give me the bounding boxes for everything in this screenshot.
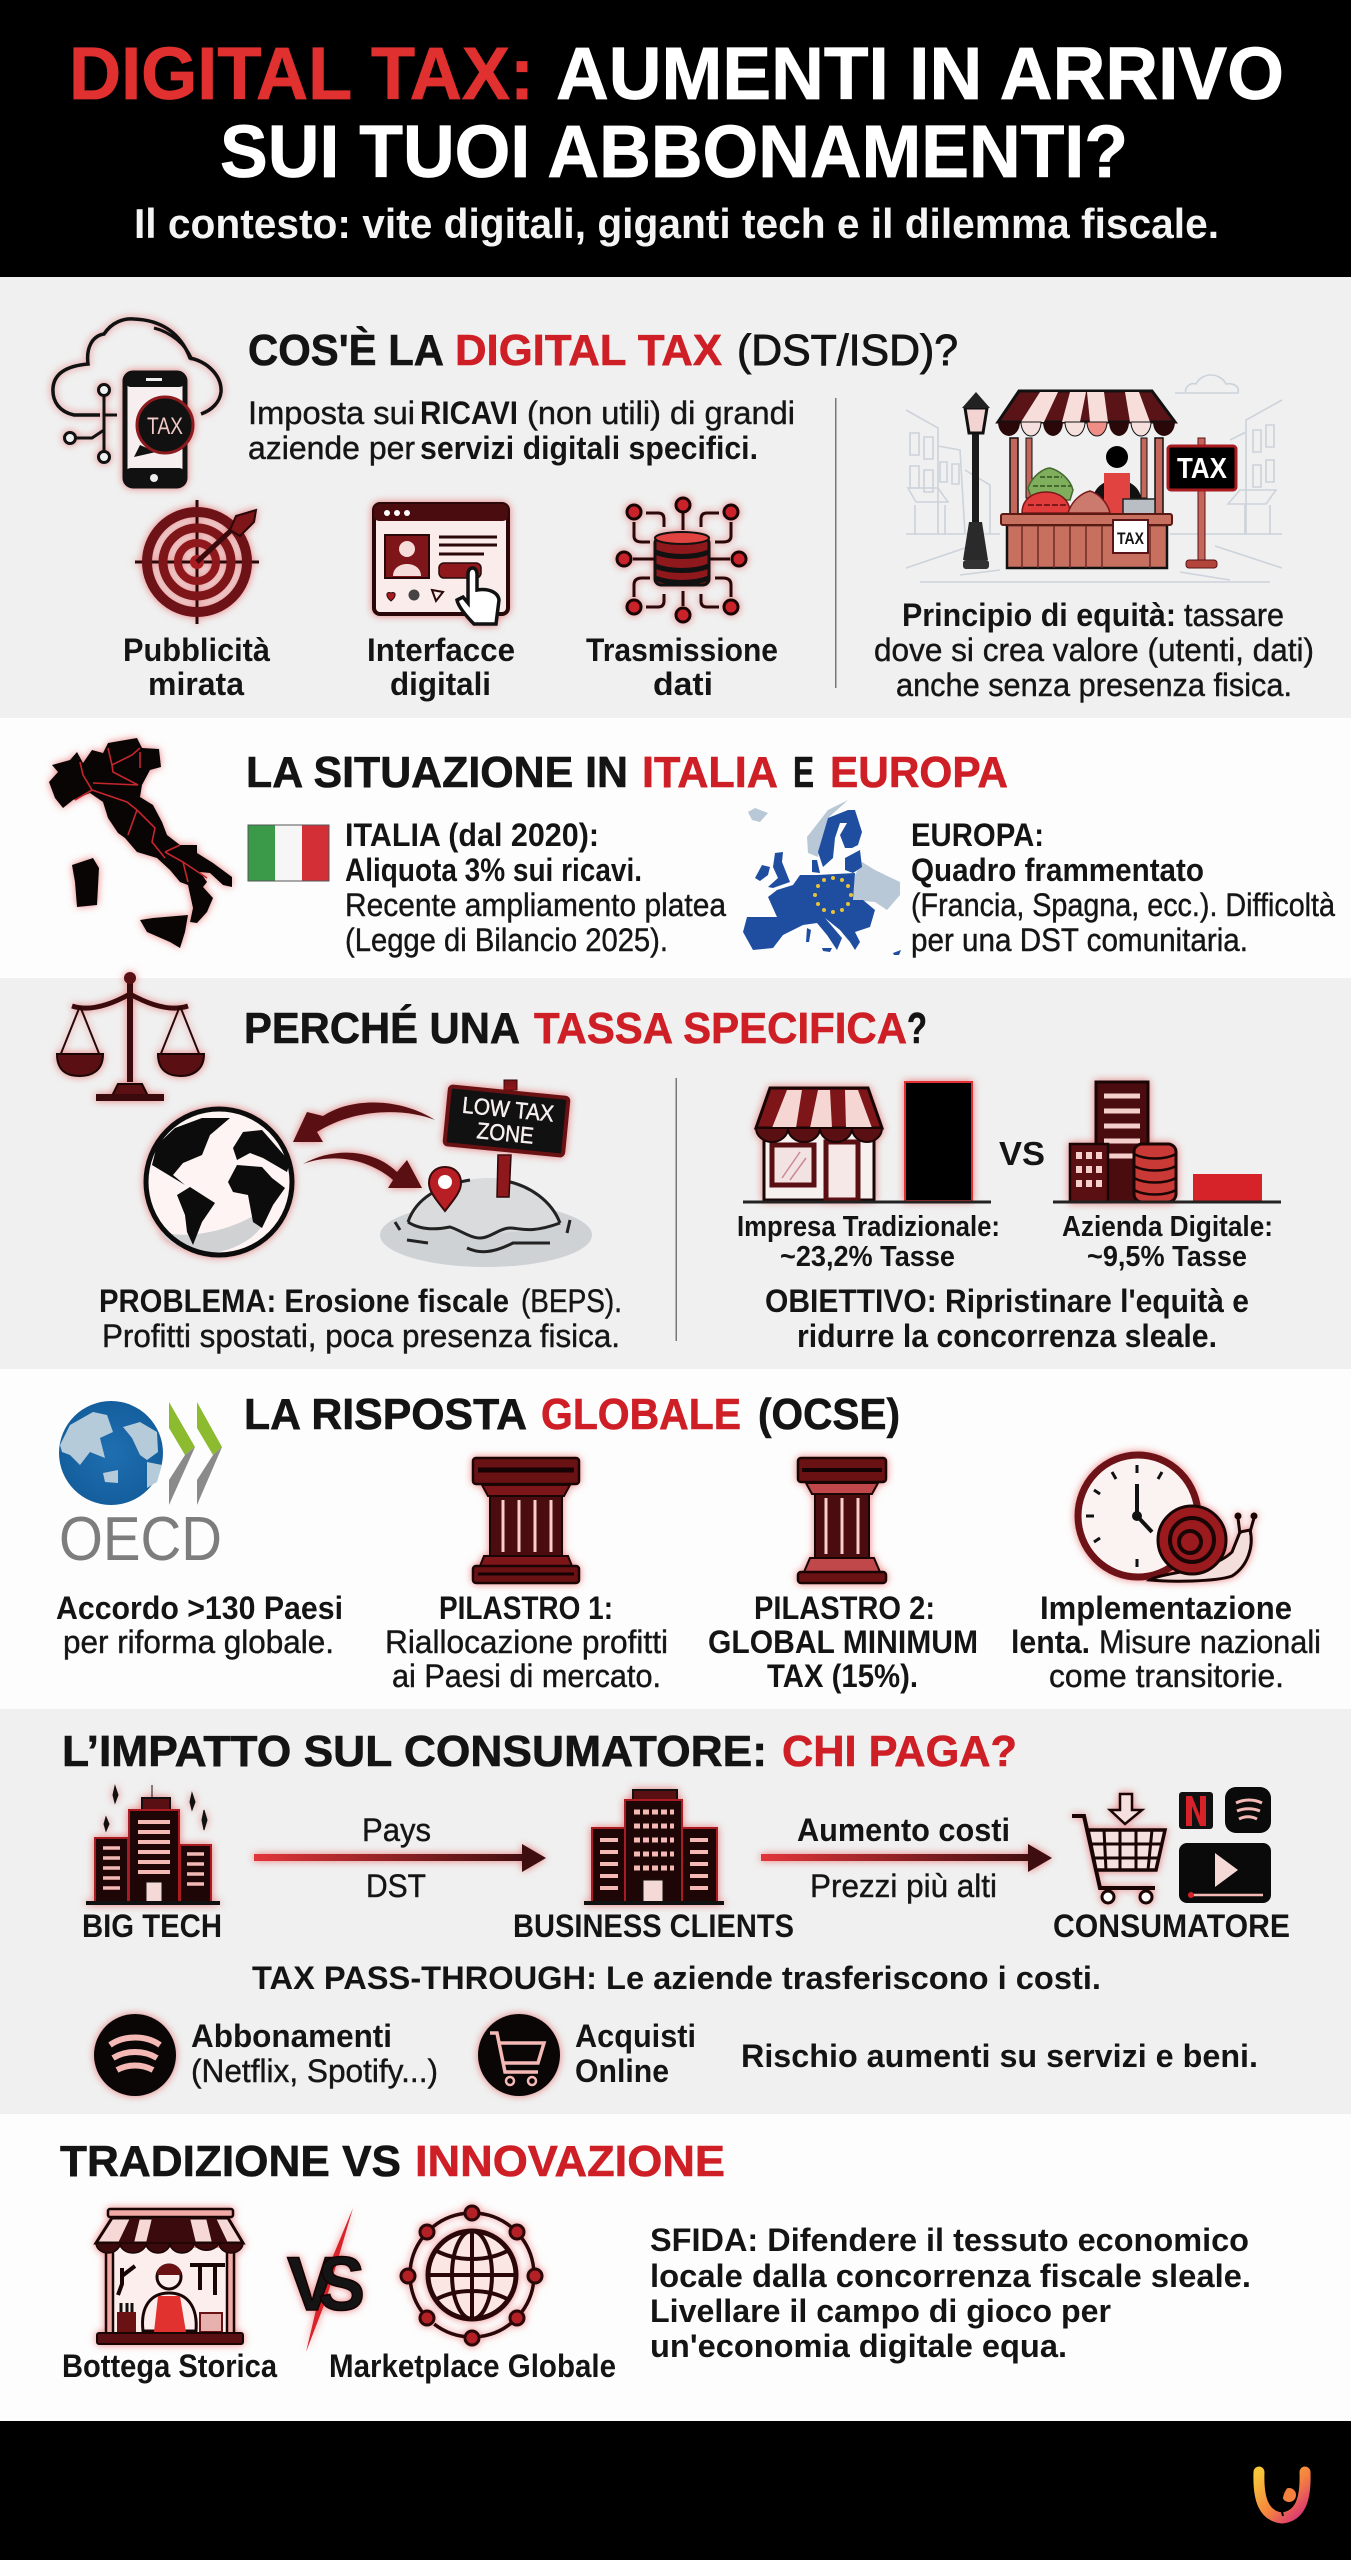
icon: shopping cart <box>1072 1794 1165 1903</box>
vs emblem: S <box>318 2242 365 2327</box>
heading: COS'È LA <box>248 325 444 375</box>
heading: L’IMPATTO SUL CONSUMATORE: <box>62 1727 767 1776</box>
title: DIGITAL TAX: <box>69 32 534 115</box>
label: impresa tradizionale: Impresa Tradizionale: <box>737 1211 1000 1243</box>
text block: definition: Imposta sui <box>248 395 415 431</box>
icon: cloud and phone: TAX <box>147 413 183 440</box>
text block: italia <box>345 817 726 958</box>
text block: pilastro 1: PILASTRO 1: <box>439 1590 613 1626</box>
icon: pillar 2 <box>798 1458 886 1583</box>
text block: sfida: Livellare il campo di gioco per <box>650 2293 1111 2329</box>
illustration: market stall: TAX <box>1177 453 1228 485</box>
illustration: market stall <box>906 375 1282 582</box>
label: DST: DST <box>366 1868 426 1904</box>
label: interfacce digitali <box>367 632 515 702</box>
text block: pilastro 1: Riallocazione profitti <box>385 1624 668 1660</box>
title: SUI TUOI ABBONAMENTI? <box>220 110 1128 193</box>
label: big tech: BIG TECH <box>82 1908 222 1944</box>
vs emblem <box>287 2208 365 2352</box>
heading: PERCHÉ UNA <box>244 1003 520 1053</box>
header panel <box>0 0 1351 277</box>
label: trasmissione dati: Trasmissione <box>586 632 778 668</box>
text block: problema <box>99 1283 622 1354</box>
text block: definition: servizi digitali specifici. <box>420 430 758 466</box>
illustration: low tax zone <box>380 1080 592 1267</box>
label: azienda digitale: Azienda Digitale: <box>1062 1211 1273 1243</box>
map: europe <box>743 800 901 955</box>
logo: OECD <box>59 1401 222 1574</box>
illustration: market stall: TAX <box>1117 529 1145 548</box>
icon: video player <box>1179 1843 1271 1903</box>
counter <box>1007 525 1167 568</box>
footer band <box>0 2421 1351 2560</box>
text block: principio di equità: tassare <box>1184 597 1284 633</box>
panel: risposta globale <box>0 1369 1351 1709</box>
heading: GLOBALE <box>541 1390 741 1439</box>
text block: pilastro 1: ai Paesi di mercato. <box>392 1658 661 1694</box>
heading: DIGITAL TAX <box>455 326 722 375</box>
illustration: low tax zone: ZONE <box>476 1117 535 1149</box>
heading <box>246 748 1008 797</box>
text block: europa: per una DST comunitaria. <box>911 922 1248 958</box>
text block: sfida: locale dalla concorrenza fiscale sleale. <box>650 2258 1251 2294</box>
text block: italia: Recente ampliamento platea <box>345 887 726 923</box>
text block: principio di equità: Principio di equità: <box>902 597 1176 633</box>
text block: accordo: per riforma globale. <box>63 1624 334 1660</box>
heading: EUROPA <box>830 748 1008 797</box>
heading <box>60 2137 725 2186</box>
heading <box>244 1390 900 1439</box>
label: impresa tradizionale: ~23,2% Tasse <box>780 1241 955 1273</box>
icon: scales <box>57 972 204 1101</box>
icon: cloud and phone <box>53 319 221 486</box>
arrow: aumento costi <box>761 1844 1052 1872</box>
label: bottega storica: Bottega Storica <box>62 2348 277 2384</box>
text block: accordo <box>56 1590 343 1660</box>
text block: definition <box>248 395 795 466</box>
text block: principio di equità: anche senza presenza fisica. <box>896 667 1292 703</box>
text block: abbonamenti: Abbonamenti <box>191 2018 392 2054</box>
text block: obiettivo <box>765 1283 1249 1354</box>
text block: accordo: Accordo >130 Paesi <box>56 1590 343 1626</box>
subtitle: Il contesto: vite digitali, giganti tech e il dilemma fiscale. <box>134 200 1219 247</box>
icon: italian flag <box>248 825 329 881</box>
icon: spotify tile <box>1225 1787 1271 1833</box>
text block: sfida: un'economia digitale equa. <box>650 2328 1067 2364</box>
label: prezzi più alti: Prezzi più alti <box>810 1868 997 1904</box>
arrow: pays DST <box>254 1844 546 1872</box>
icon: data transmission <box>617 498 746 622</box>
text block: pilastro 1 <box>385 1590 668 1694</box>
text block: implementazione: lenta. <box>1011 1624 1090 1660</box>
icon: marketplace globe <box>401 2206 542 2345</box>
text block: problema: Profitti spostati, poca presenza fisica. <box>102 1318 620 1354</box>
heading: ITALIA <box>642 748 778 797</box>
panel: perché una tassa specifica <box>0 972 1351 1369</box>
icon: clock and snail <box>1078 1455 1258 1581</box>
produce <box>1028 468 1073 500</box>
text block: europa: Quadro frammentato <box>911 852 1204 888</box>
illustration: low tax zone: LOW TAX <box>461 1092 555 1127</box>
street lamp <box>972 433 979 528</box>
stall posts <box>1010 438 1018 522</box>
heading: (DST/ISD)? <box>737 326 958 375</box>
icon: target <box>135 500 259 624</box>
text block: implementazione: come transitorie. <box>1049 1658 1284 1694</box>
text block: europa <box>911 817 1335 958</box>
heading <box>248 325 958 375</box>
text block: acquisti online <box>575 2018 696 2089</box>
tax sign <box>1198 438 1205 562</box>
label: interfacce digitali: digitali <box>390 666 491 702</box>
heading: INNOVAZIONE <box>415 2137 725 2186</box>
map: italy <box>49 738 232 948</box>
icon: digital company <box>1070 1082 1176 1202</box>
vs emblem: V <box>287 2242 337 2327</box>
title <box>69 32 1284 193</box>
text block: implementazione: Implementazione <box>1040 1590 1292 1626</box>
heading: TRADIZIONE VS <box>60 2137 401 2186</box>
icon: spotify circle <box>94 2014 176 2096</box>
label: pubblicità mirata <box>123 632 270 702</box>
text block: sfida <box>650 2222 1251 2364</box>
text: rischio aumenti: Rischio aumenti su servizi e beni. <box>741 2038 1258 2074</box>
panel: impatto sul consumatore <box>0 1709 1351 2114</box>
text block: problema: (BEPS). <box>521 1283 622 1319</box>
text block: implementazione <box>1011 1590 1321 1694</box>
label: azienda digitale: ~9,5% Tasse <box>1087 1241 1247 1273</box>
panel: cos'è la digital tax <box>0 277 1351 718</box>
text block: europa: EUROPA: <box>911 817 1044 853</box>
heading: LA SITUAZIONE IN <box>246 748 628 797</box>
text block: acquisti online: Online <box>575 2053 669 2089</box>
heading: CHI PAGA? <box>782 1727 1017 1776</box>
icon: cart circle <box>478 2014 560 2096</box>
text block: obiettivo: OBIETTIVO: Ripristinare l'equità e <box>765 1283 1249 1319</box>
icon: traditional shop <box>756 1088 882 1200</box>
icon: globe <box>146 1109 292 1255</box>
text block: italia: (Legge di Bilancio 2025). <box>345 922 668 958</box>
heading: TASSA SPECIFICA <box>534 1004 907 1053</box>
label: interfacce digitali: Interfacce <box>367 632 515 668</box>
text block: definition: aziende per <box>248 430 415 466</box>
icon: historic workshop <box>96 2209 243 2344</box>
label: consumatore: CONSUMATORE <box>1053 1908 1290 1944</box>
text block: abbonamenti <box>191 2018 438 2089</box>
text block: definition: RICAVI <box>420 395 518 431</box>
text block: obiettivo: ridurre la concorrenza sleale. <box>797 1318 1217 1354</box>
heading <box>244 1003 927 1053</box>
heading: ? <box>907 1004 927 1053</box>
panel: tradizione vs innovazione <box>0 2114 1351 2421</box>
text block: definition: (non utili) di grandi <box>527 395 795 431</box>
text block: problema: PROBLEMA: Erosione fiscale <box>99 1283 509 1319</box>
title: AUMENTI IN ARRIVO <box>556 32 1284 115</box>
text block: abbonamenti: (Netflix, Spotify...) <box>191 2053 438 2089</box>
text block: pilastro 2 <box>708 1590 978 1694</box>
text block: pilastro 2: GLOBAL MINIMUM <box>708 1624 978 1660</box>
text block: implementazione: Misure nazionali <box>1099 1624 1321 1660</box>
text: tax pass-through: TAX PASS-THROUGH: Le aziende trasferiscono i costi. <box>252 1960 1101 1996</box>
logo: OECD: OECD <box>59 1505 222 1574</box>
VS label: VS <box>999 1135 1045 1172</box>
text block: acquisti online: Acquisti <box>575 2018 696 2054</box>
label: pubblicità mirata: mirata <box>148 666 244 702</box>
vendor <box>1106 446 1128 468</box>
text block: pilastro 2: PILASTRO 2: <box>754 1590 935 1626</box>
label: trasmissione dati: dati <box>653 666 713 702</box>
label: pays: Pays <box>362 1812 431 1848</box>
text block: sfida: SFIDA: Difendere il tessuto economico <box>650 2222 1249 2258</box>
text block: principio di equità <box>874 597 1314 703</box>
label: business clients: BUSINESS CLIENTS <box>513 1908 794 1944</box>
arrows: profit shift <box>293 1102 435 1188</box>
heading: LA RISPOSTA <box>244 1390 527 1439</box>
awning <box>998 391 1175 422</box>
heading: E <box>793 748 814 797</box>
icon: netflix <box>1179 1792 1213 1829</box>
bar: digital tax <box>1193 1174 1262 1201</box>
label: trasmissione dati <box>586 632 778 702</box>
logo <box>1259 2472 1305 2518</box>
bar: traditional tax <box>905 1082 972 1201</box>
icon: big tech <box>86 1785 220 1905</box>
text block: italia: ITALIA (dal 2020): <box>345 817 599 853</box>
panel: italia e europa <box>0 718 1351 978</box>
label: impresa tradizionale <box>737 1211 1000 1273</box>
icon: web interface <box>374 504 508 624</box>
label: pubblicità mirata: Pubblicità <box>123 632 270 668</box>
text block: italia: Aliquota 3% sui ricavi. <box>345 852 642 888</box>
heading: (OCSE) <box>758 1390 900 1439</box>
label: azienda digitale <box>1062 1211 1273 1273</box>
label: aumento costi: Aumento costi <box>797 1812 1010 1848</box>
icon: pillar 1 <box>473 1458 579 1583</box>
label: marketplace globale: Marketplace Globale <box>329 2348 616 2384</box>
text block: pilastro 2: TAX (15%). <box>767 1658 918 1694</box>
text block: principio di equità: dove si crea valore (utenti, dati) <box>874 632 1314 668</box>
icon: business clients <box>584 1790 724 1905</box>
